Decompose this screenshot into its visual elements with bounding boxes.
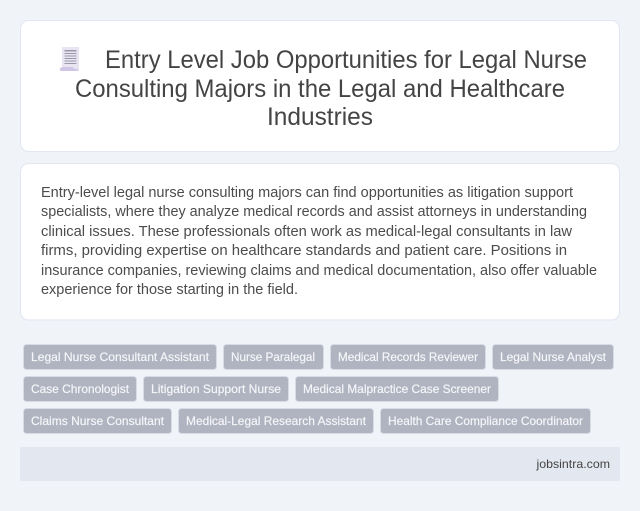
text block: description: specialists, where they analyze medical records and assist attorneys in understanding [41,204,587,220]
tag [24,408,172,434]
tag: Medical-Legal Research Assistant [186,414,367,428]
tag: Health Care Compliance Coordinator [388,414,583,428]
tag: Medical Malpractice Case Screener [303,382,491,396]
text block: description: clinical issues. These professionals often work as medical-legal consultants in law [41,224,573,240]
tag list [24,344,614,434]
tag: Legal Nurse Analyst [500,350,607,364]
title: Entry Level Job Opportunities for Legal Nurse [105,46,587,74]
text block: description [41,185,597,298]
title [75,46,587,131]
tag [330,344,486,370]
tag [224,344,324,370]
tag: Claims Nurse Consultant [31,414,165,428]
tag: Medical Records Reviewer [338,350,478,364]
tag [144,376,288,402]
icon: document scroll [60,47,79,71]
tag [24,344,216,370]
tag [492,344,614,370]
tag: Litigation Support Nurse [151,382,281,396]
text block: description: Entry-level legal nurse consulting majors can find opportunities as litigation support [41,185,573,201]
panel: description [20,164,620,320]
tag [380,408,590,434]
text block: description: firms, providing expertise on healthcare standards and patient care. Positions in [41,243,567,259]
footer: jobsintra.com [535,457,610,471]
tag [24,376,136,402]
tag: Nurse Paralegal [231,350,315,364]
title: Industries [267,103,373,131]
tag: Case Chronologist [31,382,130,396]
title: Consulting Majors in the Legal and Healthcare [75,75,565,103]
tag [296,376,498,402]
footer [20,447,620,481]
tag [178,408,374,434]
text block: description: experience for those starting in the field. [41,282,298,298]
panel: title card [20,20,620,152]
text block: description: insurance companies, reviewing claims and medical documentation, also offer valuable [41,263,597,279]
tag: Legal Nurse Consultant Assistant [31,350,210,364]
